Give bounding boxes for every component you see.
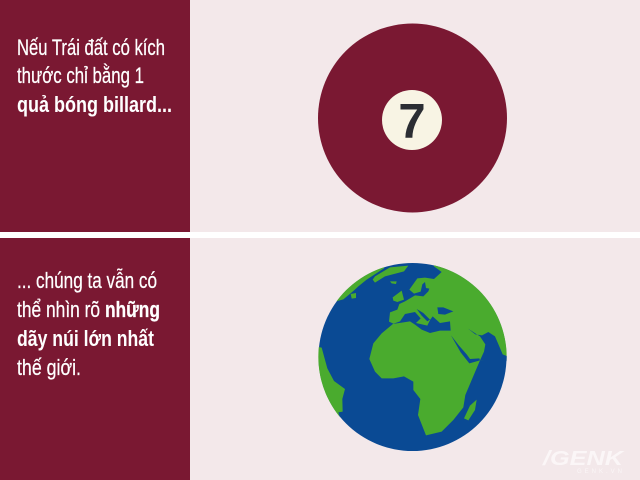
text block: bottom caption: thể nhìn rõ những xyxy=(17,297,160,322)
panel: top right background xyxy=(190,0,640,232)
land: South America xyxy=(318,347,345,417)
text block: bottom caption xyxy=(17,268,160,380)
panel: top left maroon xyxy=(0,0,190,232)
text block: bottom caption: thế giới. xyxy=(17,355,81,380)
land: British Isles xyxy=(393,291,404,302)
icon: billiard ball number 7: 7 xyxy=(398,95,426,149)
panel: bottom right background xyxy=(190,238,640,480)
text block: top caption xyxy=(17,35,172,117)
land: Eurasia and Africa xyxy=(369,265,507,436)
land: Newfoundland xyxy=(351,293,356,299)
text block: top caption: quả bóng billard... xyxy=(17,92,172,117)
watermark: GENK logo: /GENK xyxy=(542,448,625,470)
text block: top caption: Nếu Trái đất có kích xyxy=(17,35,165,60)
land: North America xyxy=(336,267,384,302)
panel: bottom left maroon xyxy=(0,238,190,480)
sea: Mediterranean xyxy=(393,312,451,333)
watermark: GENK logo: GENK.VN xyxy=(577,469,622,475)
land: Greenland xyxy=(373,266,408,283)
sea: Red Sea and Gulf of Aden xyxy=(451,335,480,363)
text block: bottom caption: ... chúng ta vẫn có xyxy=(17,268,157,293)
text block: top caption: thước chỉ bằng 1 xyxy=(17,63,144,88)
land: Iceland xyxy=(390,281,397,284)
text block: bottom caption: dãy núi lớn nhất xyxy=(17,326,155,351)
icon: earth globe xyxy=(318,263,507,451)
sea: Adriatic xyxy=(417,309,430,321)
sea: Indian Ocean and Persian Gulf xyxy=(468,328,507,362)
watermark: GENK logo xyxy=(542,448,625,475)
horizontal separator band xyxy=(0,232,640,238)
icon: billiard ball number 7 xyxy=(318,24,507,212)
sea: Black Sea xyxy=(437,307,453,315)
land: Madagascar xyxy=(464,400,477,420)
